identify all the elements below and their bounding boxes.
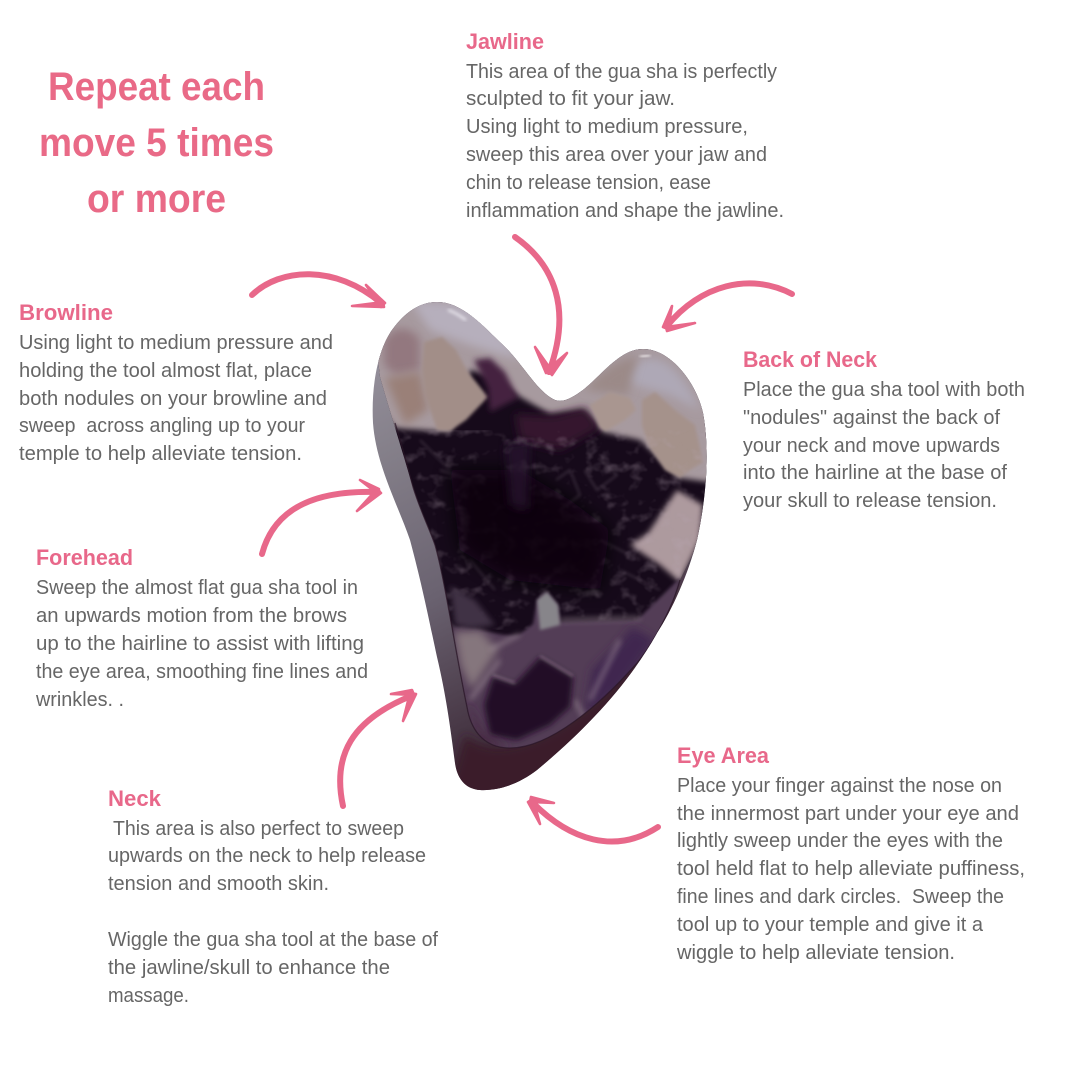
body: Neck (108, 818, 438, 1007)
body: Eye Area: wiggle to help alleviate tension. (676, 942, 955, 964)
body: Back of Neck: Place the gua sha tool with both (743, 379, 1025, 401)
highlights (448, 310, 466, 320)
body: Eye Area: tool held flat to help alleviate puffiness, (677, 858, 1025, 880)
text block: Browline (19, 300, 333, 465)
body: Jawline: inflammation and shape the jawline. (466, 200, 784, 222)
body: Eye Area (676, 775, 1025, 964)
body: Back of Neck (743, 379, 1025, 512)
body: Jawline: sculpted to fit your jaw. (466, 88, 675, 110)
stone face (378, 302, 707, 748)
body: Forehead: Sweep the almost flat gua sha tool in (36, 577, 358, 599)
arrow: to neck (340, 690, 416, 806)
text block: Back of Neck (743, 347, 1025, 512)
body: Eye Area: lightly sweep under the eyes with the (677, 830, 1003, 852)
body: Neck: tension and smooth skin. (108, 873, 329, 895)
body: Eye Area: the innermost part under your eye and (677, 803, 1019, 825)
title: move 5 times (39, 121, 274, 165)
body: Neck: massage. (108, 985, 189, 1007)
text block: Forehead (35, 545, 368, 711)
crystal: lower right (630, 490, 703, 582)
crystal line texture (385, 430, 705, 630)
body: Jawline (466, 61, 784, 222)
body: Jawline: chin to release tension, ease (466, 172, 711, 194)
pale top band (378, 302, 706, 486)
body: Jawline: sweep this area over your jaw and (466, 144, 767, 166)
arrow: to back of neck (663, 283, 792, 331)
body: Neck: upwards on the neck to help release (108, 845, 426, 867)
title (39, 65, 274, 221)
body: Back of Neck: into the hairline at the base of (743, 462, 1007, 484)
body: Jawline: This area of the gua sha is perfectly (466, 61, 777, 83)
body: Neck: the jawline/skull to enhance the (108, 957, 390, 979)
body: Eye Area: fine lines and dark circles. Sweep the (677, 886, 1004, 908)
heading: Jawline: Jawline (466, 29, 544, 54)
body: Eye Area: Place your finger against the nose on (677, 775, 1002, 797)
heading: Forehead: Forehead (36, 545, 133, 570)
crystal: top centre (592, 396, 635, 432)
dark centre haze (450, 470, 610, 590)
body: Browline: Using light to medium pressure and (19, 332, 333, 354)
arrow: to browline (252, 274, 385, 307)
lower purple section (452, 578, 680, 760)
body: Browline: holding the tool almost flat, place (19, 360, 312, 382)
body: Forehead: an upwards motion from the brows (36, 605, 347, 627)
heading: Neck: Neck (108, 786, 162, 811)
body: Forehead: up to the hairline to assist with lifting (36, 633, 364, 655)
arrow: to forehead (262, 480, 381, 554)
text block: Jawline (466, 29, 784, 222)
heading: Eye Area: Eye Area (677, 743, 770, 768)
icon: gua sha stone (372, 302, 707, 790)
body: Browline: sweep across angling up to your (19, 415, 305, 437)
body: Back of Neck: your neck and move upwards (743, 435, 1000, 457)
body: Browline: temple to help alleviate tension. (19, 443, 302, 465)
body: Forehead: wrinkles. . (35, 689, 124, 711)
crystal: top right (642, 392, 703, 478)
arrow: to jawline (515, 237, 567, 375)
body: Neck: Wiggle the gua sha tool at the base of (108, 929, 438, 951)
body: Neck: This area is also perfect to sweep (113, 818, 404, 840)
body: Browline: both nodules on your browline and (19, 388, 327, 410)
crystal: left (422, 337, 488, 431)
body: Browline (19, 332, 333, 465)
inner rim line (395, 423, 680, 748)
body: Back of Neck: "nodules" against the back of (743, 407, 1000, 429)
body: Back of Neck: your skull to release tension. (743, 490, 997, 512)
body: Eye Area: tool up to your temple and give it a (677, 914, 984, 936)
purple notch (474, 358, 518, 412)
text block: Neck (108, 786, 438, 1007)
title: or more (87, 177, 226, 221)
maroon lower rim (454, 570, 688, 790)
heading: Back of Neck: Back of Neck (743, 347, 878, 372)
heading: Browline: Browline (19, 300, 113, 325)
title: Repeat each (48, 65, 265, 109)
body: Forehead (35, 577, 368, 711)
text block: Eye Area (676, 743, 1025, 964)
body: Jawline: Using light to medium pressure, (466, 116, 748, 138)
left lobe pink haze (384, 329, 420, 375)
body: Forehead: the eye area, smoothing fine lines and (36, 661, 368, 683)
dark crystals (484, 657, 573, 740)
arrow: to eye area (528, 797, 658, 842)
